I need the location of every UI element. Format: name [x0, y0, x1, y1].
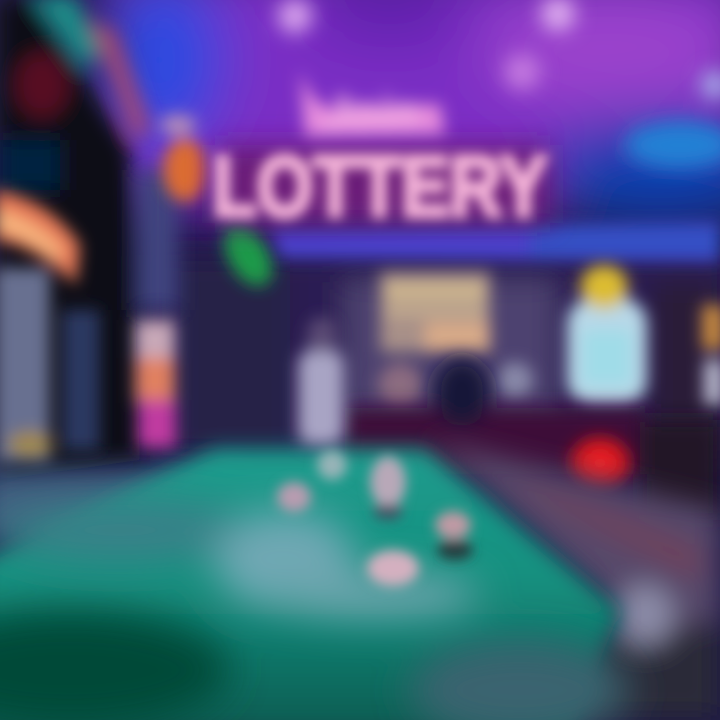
teal table [0, 448, 620, 720]
left dark storefront [0, 0, 178, 480]
standing figure [298, 317, 344, 445]
dark counter [345, 358, 720, 520]
back wall [150, 255, 720, 460]
lottery sign text: LOTTERY [212, 139, 548, 235]
grey floor [430, 440, 720, 720]
sign backing [215, 145, 550, 223]
red light [570, 437, 630, 489]
script sign text [300, 70, 445, 138]
left neon panel [0, 190, 176, 463]
left floor haze [0, 470, 240, 540]
ceiling glow [100, 0, 720, 225]
table shadows and highlights [0, 500, 630, 720]
script sign text: Join [323, 86, 417, 138]
blue canopy band [270, 222, 720, 262]
orange and green balloons [160, 115, 282, 294]
ceiling lights [278, 0, 720, 169]
lit tan window [378, 272, 490, 407]
glowing machine [497, 265, 720, 406]
lottery balls [277, 450, 473, 586]
